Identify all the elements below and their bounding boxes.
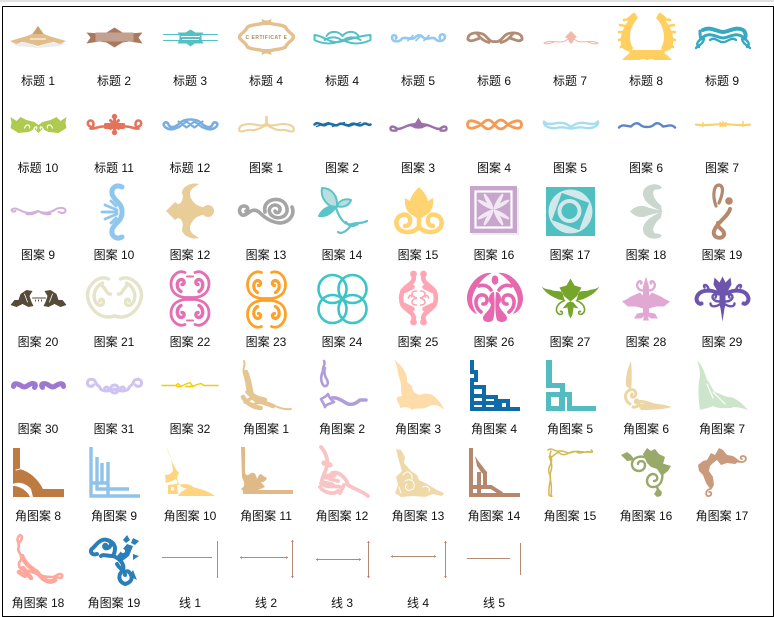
icon: 图案 5 light blue waves [544, 122, 598, 128]
icon: 标题 4 certificate frame [240, 19, 294, 55]
icon: 角图案 15 gold rope corner [548, 449, 592, 496]
icon: 线 3 lines with arrows [316, 541, 370, 578]
icon: 图案 25 pink damask [401, 271, 436, 325]
label: 图案 21 [94, 334, 135, 349]
icon: 图案 31 pale purple scrolls [87, 379, 142, 393]
label: 图案 20 [18, 334, 59, 349]
label: 图案 15 [398, 247, 439, 262]
label: 标题 6 [477, 74, 511, 88]
label: 图案 24 [322, 334, 363, 349]
label: 图案 2 [325, 160, 359, 175]
label: 角图案 7 [699, 421, 745, 436]
icon: 图案 1 tan flourish [239, 117, 294, 132]
icon: 标题 12 blue scroll [164, 120, 217, 129]
label: 图案 31 [94, 421, 135, 436]
icon: 角图案 4 blue key corner [472, 360, 520, 409]
label: 角图案 9 [91, 508, 137, 523]
label: 图案 29 [702, 334, 743, 349]
label: 图案 1 [249, 160, 283, 175]
label: 角图案 14 [468, 508, 521, 523]
label: 角图案 6 [623, 421, 669, 436]
icon: 图案 20 dark scrolls [10, 290, 66, 307]
icon: 图案 17 teal circle tile [546, 187, 595, 236]
icon: 角图案 6 tan corner [626, 361, 672, 410]
icon: 标题 1 banner [10, 26, 66, 48]
label: 角图案 8 [15, 508, 61, 523]
icon: 角图案 11 tan corner [241, 447, 293, 494]
label: 图案 6 [629, 160, 663, 175]
icon: 标题 7 pink flourish [544, 31, 598, 44]
icon: 图案 13 grey spirals [240, 200, 293, 223]
label: 图案 9 [21, 247, 55, 262]
icon: 图案 29 purple fleur [696, 276, 748, 322]
label: 角图案 3 [395, 421, 441, 436]
icon: 图案 24 teal rosette [318, 275, 366, 323]
icon: 图案 4 orange knots [468, 120, 522, 129]
label: 角图案 10 [164, 508, 217, 523]
icon: 角图案 13 tan lace corner [395, 449, 444, 497]
label: 标题 2 [97, 74, 131, 88]
icon: 图案 6 blue wave [619, 123, 675, 128]
label: 角图案 1 [243, 421, 289, 436]
icon: 标题 6 brown scroll [468, 33, 522, 42]
icon: 线 4 lines with arrows [391, 541, 447, 578]
label: 图案 22 [170, 334, 211, 349]
icon: 图案 23 orange double ring [248, 272, 286, 327]
label: 图案 17 [550, 247, 591, 262]
label: 图案 19 [702, 247, 743, 262]
icon: 角图案 19 blue arabesque corner [91, 535, 139, 584]
icon: 角图案 9 blue stripe corner [91, 447, 140, 496]
icon: 图案 30 purple scrolls [14, 384, 64, 388]
label: 标题 7 [553, 74, 587, 88]
label: 角图案 13 [392, 508, 445, 523]
label: 图案 16 [474, 247, 515, 262]
icon: 标题 9 teal knot [696, 29, 750, 48]
icon: 角图案 18 coral corner [18, 535, 62, 582]
label: 角图案 2 [319, 421, 365, 436]
label: 图案 30 [18, 421, 59, 436]
icon: 线 1 plain lines [162, 541, 218, 578]
label: 图案 18 [626, 247, 667, 262]
label: 标题 11 [94, 161, 134, 175]
icon: 角图案 8 brown corner [13, 448, 64, 497]
icon: 角图案 5 teal key corner [546, 360, 596, 411]
icon: 图案 9 lilac flourish [12, 208, 66, 214]
icon: 角图案 14 brown corner [471, 448, 520, 495]
label: 标题 3 [173, 74, 207, 88]
icon: 图案 22 pink double ring [171, 272, 209, 325]
label: 线 3 [331, 596, 353, 610]
icon: 角图案 2 purple corner [321, 361, 366, 407]
icon: 图案 32 yellow line [162, 382, 218, 386]
icon: 图案 16 lilac square tile [470, 186, 519, 235]
icon: 标题 3 teal lines [164, 30, 218, 46]
label: 线 5 [483, 596, 505, 610]
label: 角图案 17 [696, 508, 749, 523]
label: 标题 4 [325, 74, 359, 88]
icon: 角图案 16 olive vine corner [621, 448, 671, 497]
icon: 角图案 17 tan scroll corner [698, 448, 746, 496]
icon: 角图案 7 pale green corner [697, 360, 748, 410]
icon: 图案 12 tan fleur [166, 183, 214, 239]
label: 图案 5 [553, 160, 587, 175]
icon: 角图案 10 yellow corner [165, 447, 215, 496]
icon: 标题 10 green foliage [10, 117, 66, 133]
icon: 图案 26 pink butterfly [467, 273, 523, 322]
label: 标题 4 [249, 74, 283, 88]
label: 图案 32 [170, 421, 211, 436]
label: 图案 27 [550, 334, 591, 349]
icon: 线 5 plain lines [467, 543, 520, 575]
label: 角图案 4 [471, 421, 517, 436]
label: 图案 14 [322, 247, 363, 262]
label: 图案 28 [626, 334, 667, 349]
label: 线 1 [179, 596, 201, 610]
icon: 图案 3 purple flourish [390, 118, 446, 131]
icon: 线 2 lines with arrows [240, 540, 294, 578]
label: 角图案 16 [620, 508, 673, 523]
icon: 图案 7 yellow line [696, 122, 750, 126]
icon: 图案 10 blue ornament [102, 186, 122, 238]
icon: 图案 15 yellow tulip [396, 187, 442, 232]
label: 图案 4 [477, 160, 511, 175]
label: 图案 10 [94, 247, 135, 262]
label: 角图案 19 [88, 595, 141, 610]
label: 图案 23 [246, 334, 287, 349]
icon: 角图案 1 tan corner [243, 361, 291, 409]
icon: 标题 4 teal waves [314, 32, 370, 43]
label: 角图案 12 [316, 508, 369, 523]
icon: 标题 11 red knot [88, 115, 141, 134]
icon: 角图案 12 pink corner [320, 447, 368, 496]
icon: 图案 14 teal sprig [319, 188, 367, 233]
icon: 图案 18 grey-green fleur [630, 184, 662, 239]
label: 角图案 11 [240, 508, 292, 523]
label: 标题 8 [629, 74, 663, 88]
label: 角图案 18 [12, 595, 65, 610]
label: 标题 9 [705, 74, 739, 88]
label: 线 2 [255, 596, 277, 610]
label: 标题 5 [401, 74, 435, 88]
icon: 标题 2 ribbon [86, 28, 142, 48]
icon: 图案 2 dark blue band [314, 122, 370, 126]
label: 图案 25 [398, 334, 439, 349]
label: 角图案 15 [544, 508, 597, 523]
label: 图案 3 [401, 160, 435, 175]
icon: 图案 21 cream heart scroll [87, 278, 142, 317]
icon: 图案 28 lilac fleur [622, 276, 670, 320]
label: 图案 7 [705, 160, 739, 175]
label: 标题 1 [21, 74, 55, 88]
label: 线 4 [407, 596, 429, 610]
label: 图案 26 [474, 334, 515, 349]
label: 图案 13 [246, 247, 287, 262]
icon: 标题 8 laurel wreath [619, 13, 675, 60]
label: 标题 12 [170, 161, 211, 175]
label: 角图案 5 [547, 421, 593, 436]
icon: 图案 27 green leaf ornament [542, 278, 600, 318]
label: 标题 10 [18, 161, 59, 175]
icon: 图案 19 brown S ornament [714, 185, 733, 238]
icon: 角图案 3 peach corner [394, 360, 444, 410]
icon: 标题 4 certificate frame: C ERTIFICAT E [246, 35, 288, 41]
label: 图案 12 [170, 247, 211, 262]
icon: 标题 5 blue scroll [392, 34, 445, 41]
